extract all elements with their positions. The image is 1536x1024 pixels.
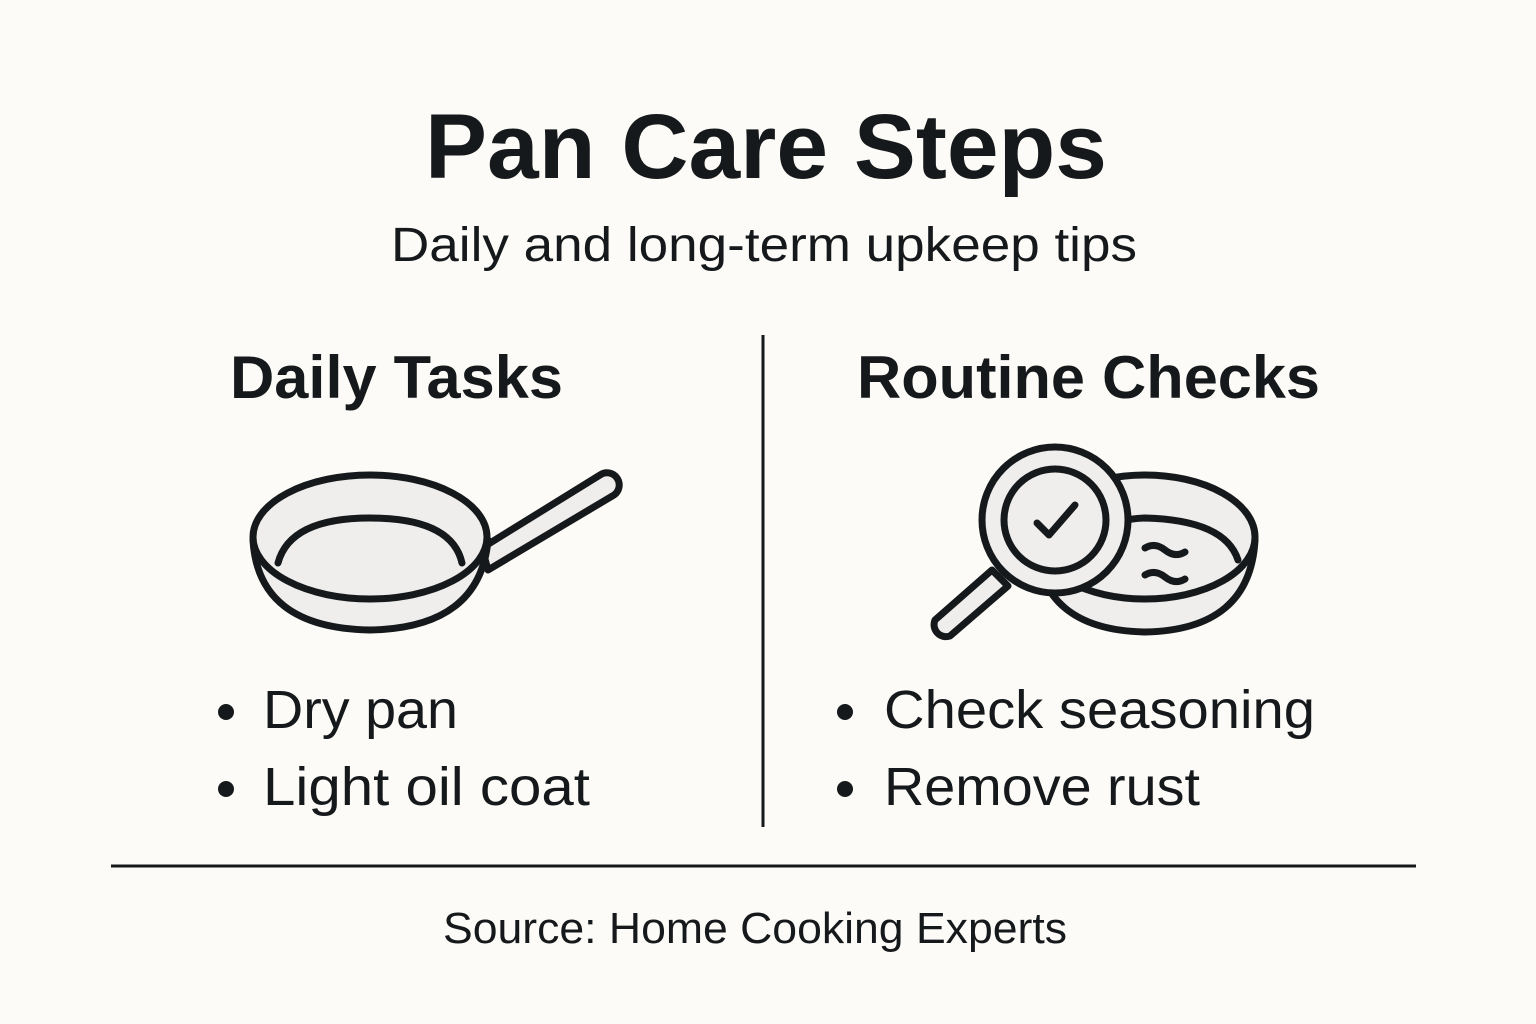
source: Source: Home Cooking Experts (443, 904, 1067, 953)
icon: magnifier over pan (934, 447, 1255, 637)
bullets: routine: Remove rust (884, 757, 1200, 817)
bullets: routine (837, 680, 1315, 817)
heading: Routine Checks: Routine Checks (857, 344, 1320, 411)
heading: Daily Tasks: Daily Tasks (230, 344, 563, 411)
title: Pan Care Steps (425, 96, 1107, 198)
bullets: daily: Light oil coat (263, 757, 590, 817)
icon: frying pan (253, 473, 619, 630)
bullets: daily (218, 680, 590, 817)
bullets: routine: Check seasoning (884, 680, 1315, 740)
bullets: daily: Dry pan (263, 680, 458, 740)
subtitle: Daily and long-term upkeep tips (391, 219, 1137, 272)
